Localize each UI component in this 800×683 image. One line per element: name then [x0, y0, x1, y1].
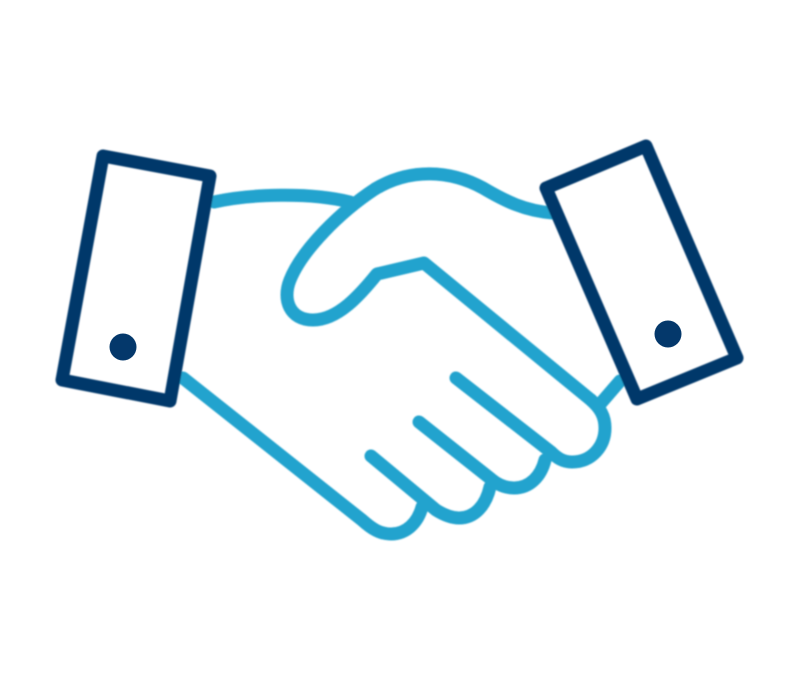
- right cuff: [546, 146, 737, 399]
- left hand and fingers: [183, 174, 620, 534]
- left cuff button: [110, 334, 136, 360]
- right cuff button: [654, 320, 682, 348]
- left cuff: [62, 156, 210, 401]
